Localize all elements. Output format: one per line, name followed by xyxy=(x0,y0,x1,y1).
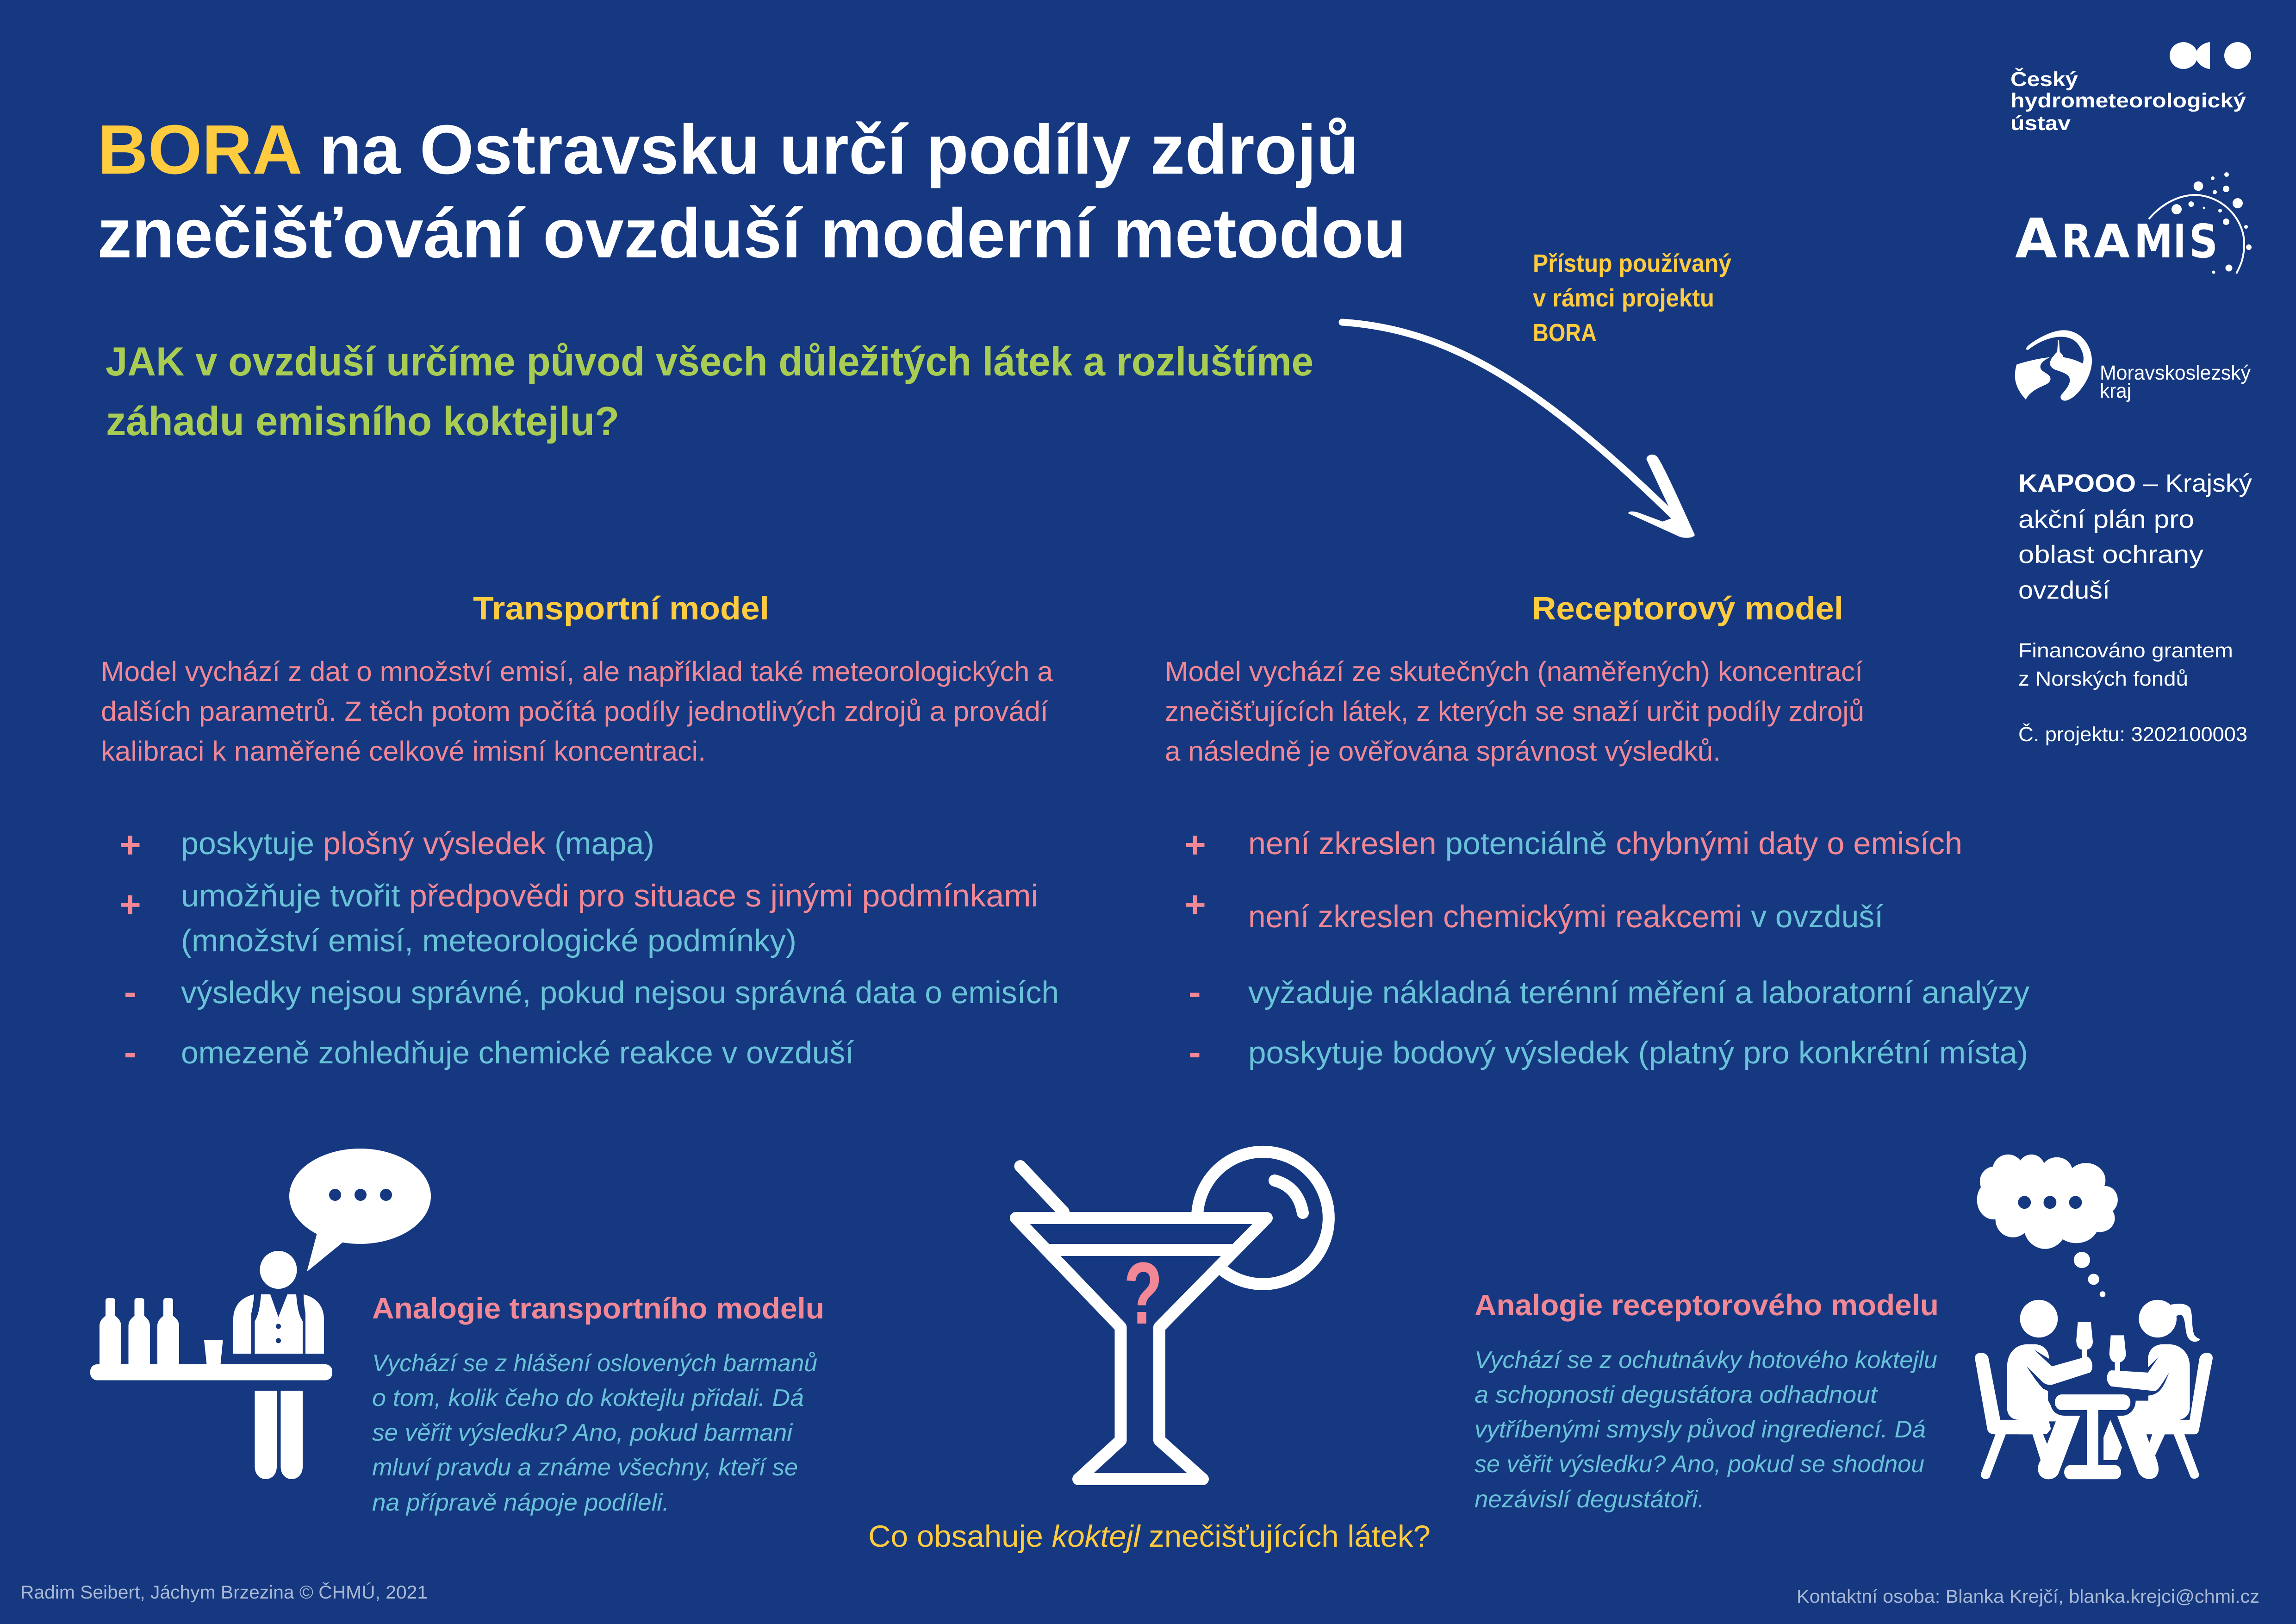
text: transport model description: kalibraci k naměřené celkové imisní koncentraci. xyxy=(101,736,706,767)
heading: receptor analogy: Analogie receptorového modelu xyxy=(1475,1288,1939,1322)
logo: ARAMIS: A xyxy=(2094,214,2130,269)
note: approach used in BORA: v rámci projektu xyxy=(1533,284,1714,312)
list: transport pros and cons: - xyxy=(124,1031,137,1073)
logo: ČHMÚ: ústav xyxy=(2010,112,2071,135)
list: receptor pros and cons: + xyxy=(1184,884,1206,925)
logo: ARAMIS: R xyxy=(2061,214,2091,269)
text: receptor analogy: Vychází se z ochutnávky hotového koktejlu xyxy=(1475,1347,1937,1374)
logo: Moravskoslezský kraj: kraj xyxy=(2100,380,2131,402)
text: transport analogy: o tom, kolik čeho do koktejlu přidali. Dá xyxy=(372,1385,804,1412)
list: receptor pros and cons: - xyxy=(1188,971,1201,1012)
text: funding: Financováno grantem xyxy=(2018,639,2233,662)
list: receptor pros and cons: poskytuje bodový výsledek (platný pro konkrétní místa) xyxy=(1248,1035,2028,1070)
text: receptor analogy: se věřit výsledku? Ano, pokud se shodnou xyxy=(1475,1451,1924,1478)
title: BORA na Ostravsku určí podíly zdrojů xyxy=(98,110,1359,188)
subtitle question: záhadu emisního koktejlu? xyxy=(106,398,619,444)
text: funding: z Norských fondů xyxy=(2018,668,2188,690)
list: transport pros and cons: výsledky nejsou správné, pokud nejsou správná data o emisích xyxy=(181,975,1059,1010)
list: receptor pros and cons: není zkreslen chemickými reakcemi v ovzduší xyxy=(1248,899,1883,934)
heading: transport analogy: Analogie transportního modelu xyxy=(372,1292,824,1325)
list: transport pros and cons: umožňuje tvořit předpovědi pro situace s jinými podmínkami xyxy=(181,878,1038,913)
logo: ARAMIS: I xyxy=(2173,214,2186,269)
caption: cocktail question: Co obsahuje koktejl znečišťujících látek? xyxy=(868,1519,1431,1553)
text: transport model description: dalších parametrů. Z těch potom počítá podíly jednotlivých zdrojů a provádí xyxy=(101,696,1048,727)
text: receptor analogy: a schopnosti degustátora odhadnout xyxy=(1475,1381,1879,1408)
text: transport analogy: Vychází se z hlášení oslovených barmanů xyxy=(372,1350,817,1377)
text: transport analogy: se věřit výsledku? Ano, pokud barmani xyxy=(372,1419,793,1446)
subtitle question: JAK v ovzduší určíme původ všech důležitých látek a rozluštíme xyxy=(106,338,1313,384)
note: approach used in BORA: Přístup používaný xyxy=(1533,250,1731,277)
footer: authors: Radim Seibert, Jáchym Brzezina © ČHMÚ, 2021 xyxy=(20,1582,428,1603)
text: KAPOOO project xyxy=(2018,469,2252,604)
list: receptor pros and cons: není zkreslen potenciálně chybnými daty o emisích xyxy=(1248,826,1962,861)
note: approach used in BORA xyxy=(1533,250,1731,347)
list: receptor pros and cons: vyžaduje nákladná terénní měření a laboratorní analýzy xyxy=(1248,975,2029,1010)
logo: ARAMIS: S xyxy=(2189,214,2218,269)
list: receptor pros and cons xyxy=(1184,824,2029,1073)
list: transport pros and cons: + xyxy=(119,884,141,925)
icon: bartender with speech bubble xyxy=(90,1149,431,1479)
logo: ČHMÚ: Český xyxy=(2010,68,2078,91)
text: receptor model description xyxy=(1165,656,1864,767)
text: receptor model description: znečišťujících látek, z kterých se snaží určit podíly zdrojů xyxy=(1165,696,1864,727)
icon: tasters with thought cloud xyxy=(1975,1155,2213,1479)
logo: ČHMÚ: hydrometeorologický xyxy=(2010,89,2246,112)
logo: Moravskoslezský kraj: Moravskoslezský xyxy=(2100,362,2251,384)
heading: receptor model: Receptorový model xyxy=(1532,590,1843,626)
text: transport analogy: na přípravě nápoje podíleli. xyxy=(372,1489,669,1516)
panel: receptor model xyxy=(1165,590,2029,1073)
text: funding xyxy=(2018,639,2247,746)
panel: transport analogy xyxy=(372,1292,824,1516)
text: receptor model description: Model vychází ze skutečných (naměřených) koncentrací xyxy=(1165,656,1863,687)
note: approach used in BORA: BORA xyxy=(1533,319,1597,347)
text: transport model description xyxy=(101,656,1053,767)
text: transport model description: Model vychází z dat o množství emisí, ale například také meteorologických a xyxy=(101,656,1053,687)
arrow to receptor model xyxy=(1342,322,1695,538)
text: receptor model description: a následně je ověřována správnost výsledků. xyxy=(1165,736,1721,767)
list: transport pros and cons: omezeně zohledňuje chemické reakce v ovzduší xyxy=(181,1035,854,1070)
text: receptor analogy: nezávislí degustátoři. xyxy=(1475,1486,1705,1513)
logo: ČHMÚ xyxy=(2010,42,2251,135)
list: transport pros and cons: + xyxy=(119,824,141,865)
text: transport analogy: mluví pravdu a známe všechny, kteří se xyxy=(372,1454,798,1481)
list: transport pros and cons: poskytuje plošný výsledek (mapa) xyxy=(181,826,654,861)
subtitle question xyxy=(106,338,1313,444)
heading: transport model: Transportní model xyxy=(473,590,769,626)
question mark: ? xyxy=(1124,1244,1163,1343)
text: funding: Č. projektu: 3202100003 xyxy=(2018,723,2247,746)
text: KAPOOO project: oblast ochrany xyxy=(2018,541,2203,568)
logo: ARAMIS: A xyxy=(2015,206,2057,270)
text: receptor analogy xyxy=(1475,1347,1937,1513)
title: znečišťování ovzduší moderní metodou xyxy=(97,194,1406,272)
text: KAPOOO project: KAPOOO – Krajský xyxy=(2018,469,2252,497)
panel: receptor analogy xyxy=(1475,1288,1939,1513)
list: receptor pros and cons: - xyxy=(1188,1031,1201,1073)
logo: ARAMIS xyxy=(2015,172,2252,274)
text: KAPOOO project: akční plán pro xyxy=(2018,506,2194,533)
list: receptor pros and cons: + xyxy=(1184,824,1206,865)
icon: cocktail glass xyxy=(1016,1152,1329,1479)
footer: contact: Kontaktní osoba: Blanka Krejčí, blanka.krejci@chmi.cz xyxy=(1797,1587,2259,1607)
text: transport analogy xyxy=(372,1350,817,1516)
text: KAPOOO project: ovzduší xyxy=(2018,576,2110,604)
logo: Moravskoslezský kraj xyxy=(2015,330,2251,402)
list: transport pros and cons: - xyxy=(124,971,137,1012)
logo: ARAMIS: M xyxy=(2134,214,2173,269)
text: receptor analogy: vytříbenými smysly původ ingrediencí. Dá xyxy=(1475,1416,1926,1443)
list: transport pros and cons xyxy=(119,824,1059,1073)
panel: transport model xyxy=(101,590,1059,1073)
title xyxy=(97,110,1406,272)
list: transport pros and cons: (množství emisí, meteorologické podmínky) xyxy=(181,923,796,958)
